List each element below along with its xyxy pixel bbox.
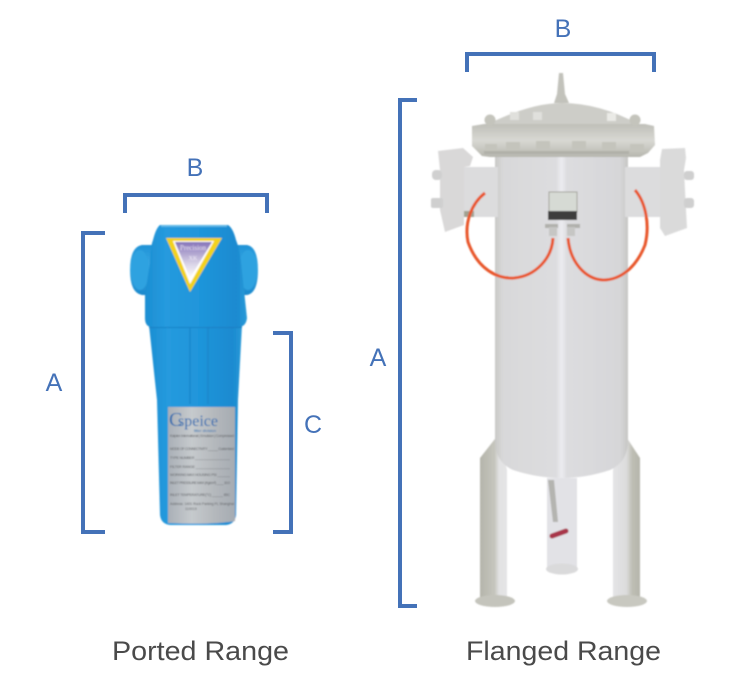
label text lines: TYPE NUMBER ___________________ [170,456,231,460]
right side flange [660,148,694,236]
head [145,225,247,327]
left port [130,245,156,295]
dome lid [486,103,640,125]
top flange [472,124,655,157]
label text lines: Address: 1401 Rock Parking Ft, Shanghai [170,502,234,506]
label text lines [170,434,234,511]
bowl collar shadow [149,326,242,328]
label text lines: WORKING MAX HOUSING PSI _______ [170,473,231,477]
legs [475,435,647,607]
label: flanged A: A [370,344,387,372]
right pipe [625,167,665,217]
gauge [545,192,580,236]
bracket: flanged A [400,100,417,606]
lower bowl [149,325,242,525]
label text lines: 110019 [185,507,197,511]
top spike [554,73,569,103]
right orange hose [568,190,647,280]
top rim highlight [161,225,227,227]
flange bolts [484,112,644,154]
label logo: C [169,409,182,431]
triangle badge: Precision [180,244,207,252]
triangle badge: XK [189,256,198,262]
label text lines: FILTER RANGE __________________ [170,465,231,469]
triangle badge [166,238,222,292]
label text lines: INLET PRESSURE MAX (Kg/cm²) ____ 10.0 [170,481,230,485]
caption: ported range: Ported Range [112,636,289,666]
bracket: ported B [125,195,267,213]
bowl ribs [190,328,208,404]
label text lines: INLET TEMPERATURE(°C) ______ 65C [170,493,230,497]
label logo: filter division [194,428,216,433]
label text lines: Kaipien International | Emulsion | Compressed [170,434,234,438]
bracket: flanged B [467,54,654,72]
label: ported B: B [187,154,203,182]
tank body [495,150,628,478]
label text lines: MODE OF CONNECTIVITY ______ Customized [170,447,234,451]
drain sight glass [546,478,578,574]
label: flanged B: B [555,15,571,43]
flanged filter illustration [431,73,694,607]
right port [234,245,258,295]
label logo: speice [178,413,218,430]
label: ported C: C [304,411,322,439]
bracket: ported C [273,333,291,532]
left pipe [458,167,498,217]
label: ported A: A [46,369,63,397]
caption: flanged range: Flanged Range [466,636,661,666]
bracket: ported A [83,233,105,532]
label logo [169,409,218,433]
left orange hose [467,193,553,278]
silver label [168,407,235,524]
ported filter illustration [130,225,258,525]
left side flange [431,148,473,232]
